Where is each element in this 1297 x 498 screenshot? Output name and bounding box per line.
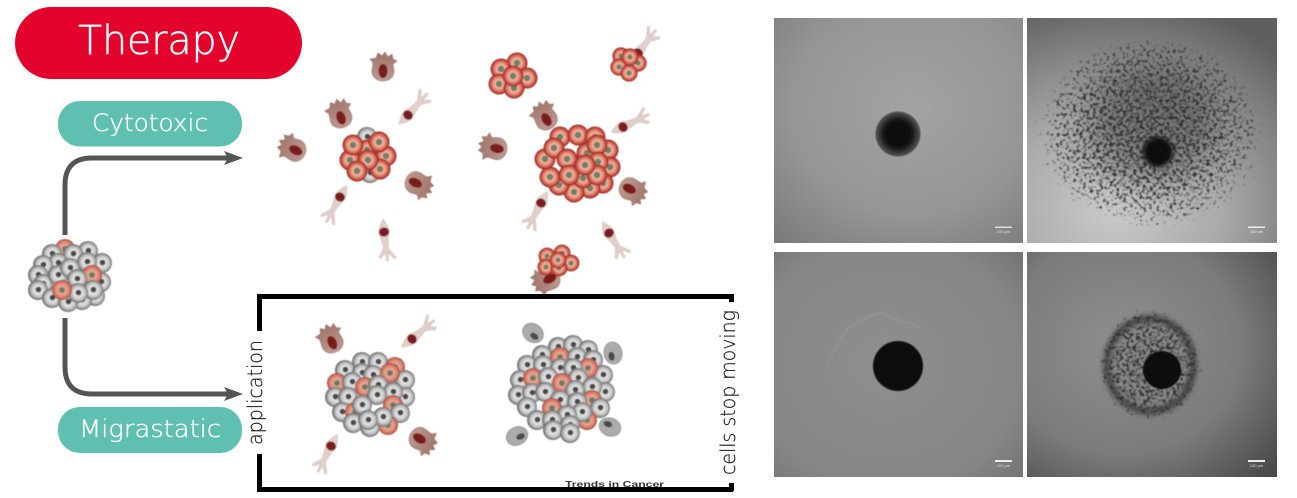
- source credit: Trends in Cancer: [565, 479, 665, 489]
- scale bar: [1248, 226, 1265, 234]
- stopped grey cells: [503, 319, 624, 449]
- scale bar: [995, 226, 1012, 234]
- grey tumour cluster: [508, 335, 615, 443]
- mesenchymal migrating cells: [520, 25, 662, 262]
- scale bar: 100 µm: [1250, 463, 1264, 468]
- micrograph: control spheroid start: [774, 18, 1023, 243]
- dispersed cells: [1032, 32, 1268, 232]
- spheroid: [876, 112, 920, 156]
- migrastatic stage 2: tumour with stopped cells: [503, 319, 624, 449]
- large red tumour cluster: [534, 124, 620, 202]
- satellite cluster top left: [488, 52, 538, 98]
- cytotoxic stage 2: regrown tumour with more migrating cells: [476, 25, 662, 299]
- red tumour cluster small: [340, 127, 396, 183]
- scale bar: 100 µm: [1250, 229, 1264, 234]
- spheroid core: [1143, 351, 1181, 389]
- frame label: cells stop moving: cells stop moving: [716, 310, 740, 475]
- mesenchymal migrating cells: [319, 88, 434, 262]
- arrow: tumour to migrastatic: [65, 318, 243, 401]
- micrograph: control spheroid invasion: [1027, 18, 1277, 243]
- invasion ring: [1107, 319, 1193, 411]
- initial tumour cluster: [28, 239, 112, 312]
- frame label: application: application: [243, 340, 267, 445]
- spheroid core: [1143, 137, 1173, 167]
- scale bar: [995, 460, 1012, 468]
- scale bar: 100 µm: [997, 229, 1011, 234]
- invasion halo: [1090, 69, 1214, 181]
- label: Cytotoxic: [58, 101, 242, 146]
- migrating cells: [311, 314, 442, 476]
- cytotoxic stage 1: tumour with migrating cells: [273, 52, 438, 262]
- title pill: Therapy: Therapy: [78, 18, 240, 64]
- grey tumour cluster: [325, 352, 415, 437]
- amoeboid migrating cells: [273, 52, 438, 203]
- dense cells: [1100, 310, 1202, 420]
- migrastatic stage 1: tumour with migrating cells: [311, 314, 442, 476]
- migrastatic frame: [257, 294, 734, 492]
- spheroid: [873, 341, 923, 391]
- micrograph: treated spheroid limited invasion: [1027, 252, 1277, 477]
- scale bar: 100 µm: [997, 463, 1011, 468]
- title pill: Therapy: [15, 7, 302, 79]
- amoeboid migrating cells: [476, 96, 652, 299]
- arrow: tumour to cytotoxic: [65, 151, 243, 235]
- satellite cluster bottom: [538, 245, 579, 276]
- label: Cytotoxic: Cytotoxic: [92, 109, 208, 137]
- label: Migrastatic: [58, 407, 242, 453]
- faint fibre: [828, 313, 922, 365]
- label: Migrastatic: Migrastatic: [79, 415, 221, 443]
- micrograph: treated spheroid start: [774, 252, 1023, 477]
- scale bar: [1248, 460, 1265, 468]
- satellite cluster top right: [610, 47, 647, 82]
